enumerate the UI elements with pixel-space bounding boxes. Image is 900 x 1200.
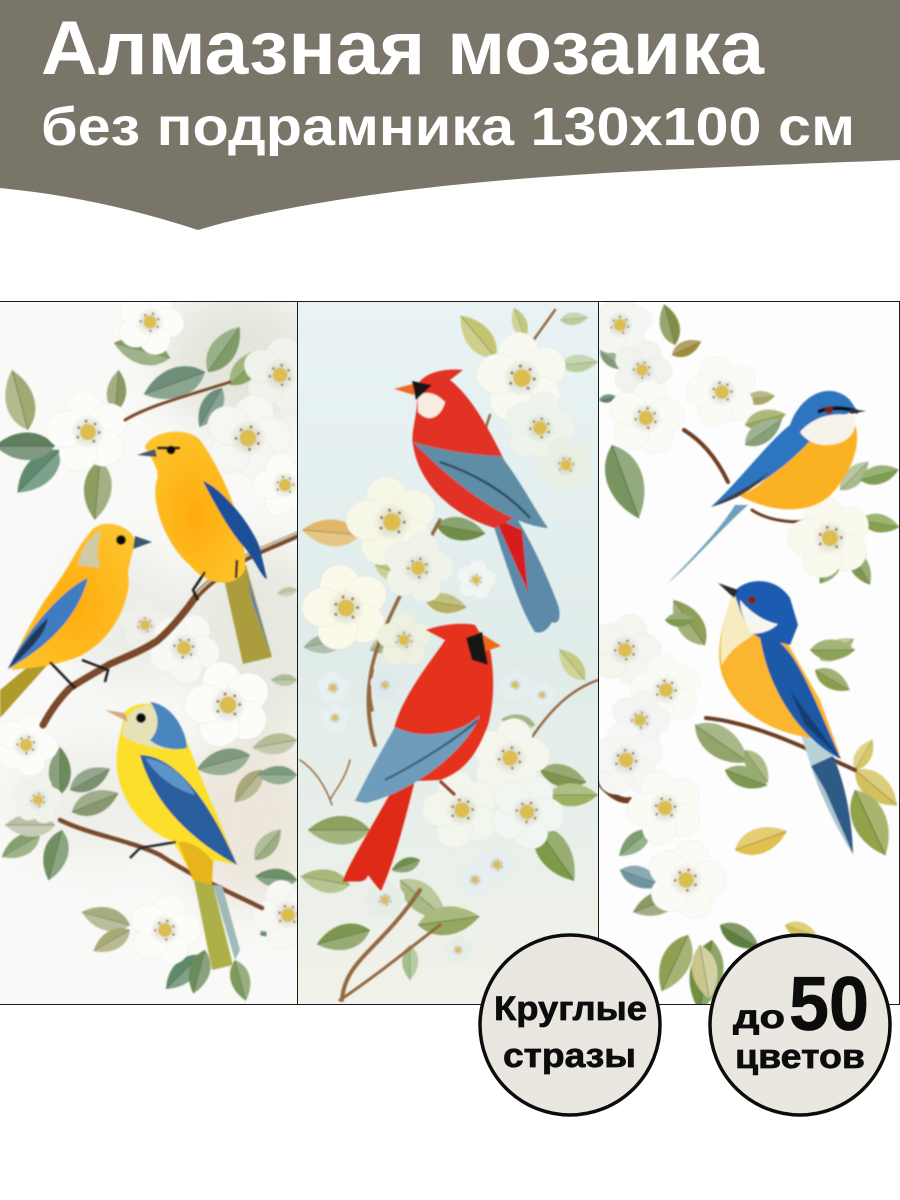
foliage bbox=[595, 302, 900, 1014]
header banner bbox=[0, 0, 900, 230]
badge text: до bbox=[733, 998, 785, 1035]
branches bbox=[300, 310, 598, 1000]
badge: round rhinestones bbox=[480, 935, 660, 1115]
bird: orange left bbox=[0, 524, 152, 718]
bird: yellow bottom bbox=[105, 702, 240, 970]
panel: blue tits bbox=[583, 293, 900, 1014]
badge text bbox=[494, 990, 647, 1075]
banner shape bbox=[0, 0, 900, 230]
badge text: цветов bbox=[735, 1038, 865, 1076]
badge: up to 50 colours bbox=[710, 935, 890, 1115]
badge text bbox=[733, 962, 869, 1076]
panel: cardinals bbox=[293, 301, 600, 1004]
flowers bbox=[293, 326, 600, 962]
subtitle: без подрамника 130х100 см bbox=[41, 97, 855, 157]
panel frame lines bbox=[0, 301, 900, 1004]
foliage bbox=[299, 305, 599, 980]
badge text: Круглые bbox=[494, 990, 647, 1028]
panel background bbox=[298, 301, 598, 1004]
bird: orange top bbox=[137, 432, 272, 664]
badge text: стразы bbox=[503, 1037, 636, 1075]
panel: yellow birds bbox=[0, 279, 332, 1004]
panel background bbox=[599, 301, 899, 1004]
panel background bbox=[0, 301, 297, 1004]
branches bbox=[599, 430, 855, 800]
badge circle bbox=[480, 935, 660, 1115]
bird: upper cardinal bbox=[394, 370, 560, 633]
badge circle bbox=[710, 935, 890, 1115]
bird: upper blue tit bbox=[668, 391, 866, 583]
badge text: 50 bbox=[789, 962, 869, 1047]
foliage bbox=[0, 320, 299, 1003]
watercolour mist bbox=[41, 302, 297, 918]
branches bbox=[43, 382, 297, 908]
title: Алмазная мозаика bbox=[41, 6, 765, 91]
bird: lower cardinal bbox=[343, 624, 501, 891]
flowers bbox=[599, 302, 870, 918]
flowers bbox=[15, 309, 297, 965]
bird: lower blue tit bbox=[718, 581, 853, 854]
